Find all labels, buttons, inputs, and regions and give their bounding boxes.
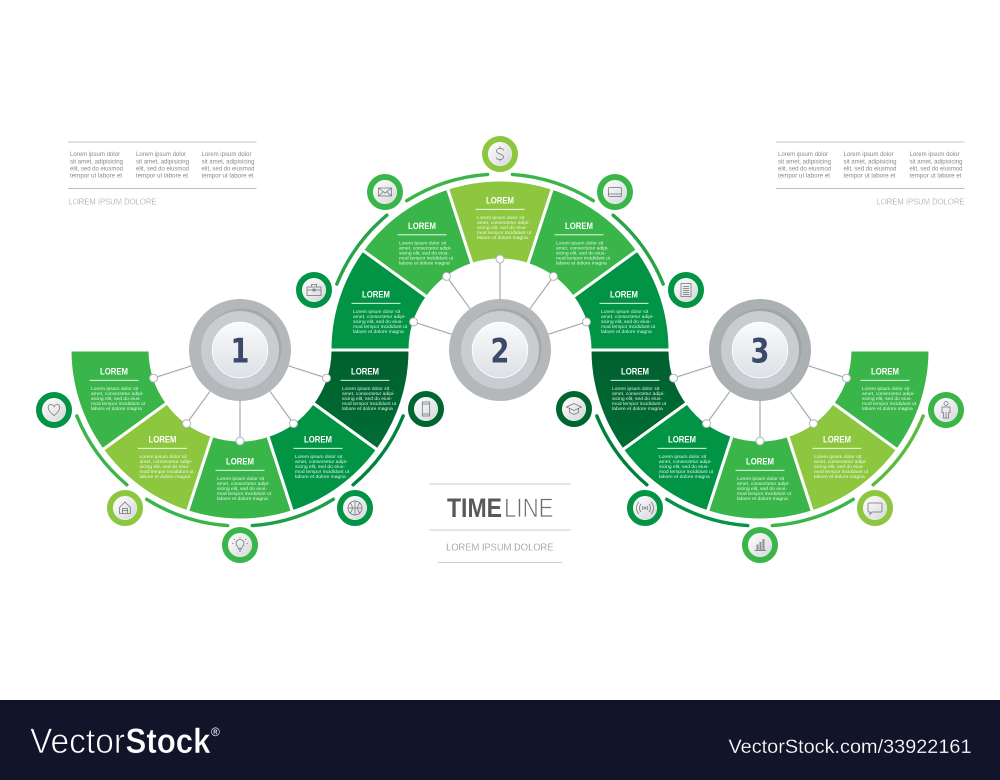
- sector text 1-4: Lorem ipsum dolor sit: [295, 454, 343, 460]
- sector text 3-5: amet, consectetur adipi-: [862, 391, 915, 397]
- sector text 3-3: sicing elit, sed do eius-: [737, 486, 787, 492]
- sector text 2-3: LOREM: [486, 195, 514, 205]
- text columns left: [70, 151, 255, 180]
- sector text 1-3: [216, 456, 272, 502]
- panel: top right text block: [776, 142, 965, 206]
- text columns left: Lorem ipsum dolor: [70, 151, 120, 158]
- sector text 1-2: amet, consectetur adipi-: [140, 459, 193, 465]
- sector text 2-4: LOREM: [565, 221, 593, 231]
- text columns left: Lorem ipsum dolor: [136, 151, 186, 158]
- icon: signal: [630, 493, 660, 523]
- footer logo: Vector: [30, 722, 125, 761]
- sector text 3-5: labore et dolore magna: [862, 406, 913, 412]
- text columns left: elit, sed do eiusmod: [202, 166, 255, 172]
- footer logo: ®: [211, 725, 220, 739]
- sector text 1-2: sicing elit, sed do eius-: [140, 464, 190, 470]
- accent arcs circle 2: [337, 174, 663, 284]
- sector text 3-3: mod tempor incididunt ut: [737, 491, 792, 497]
- sector text 1-3: sicing elit, sed do eius-: [217, 486, 267, 492]
- sector text 2-3: [476, 195, 532, 241]
- text columns right: sit amet, adipisicing: [778, 158, 832, 165]
- sector text 2-5: sicing elit, sed do eius-: [601, 319, 651, 325]
- sector text 2-5: mod tempor incididunt ut: [601, 324, 656, 330]
- sector text 3-4: mod tempor incididunt ut: [814, 469, 869, 475]
- panel: top left text block: [68, 142, 256, 206]
- text columns right: elit, sed do eiusmod: [910, 166, 963, 172]
- subtitle: LOREM IPSUM DOLORE: [446, 542, 554, 554]
- hub 1 with connectors: [150, 299, 330, 445]
- footer logo: Stock: [126, 722, 211, 761]
- sector text 2-4: [554, 221, 611, 267]
- sector text 1-3: labore et dolore magna: [217, 496, 268, 502]
- sector text 1-4: labore et dolore magna: [295, 474, 346, 480]
- sector text 1-1: labore et dolore magna: [91, 406, 142, 412]
- sector text 1-1: [90, 366, 146, 412]
- sector text 2-4: Lorem ipsum dolor sit: [556, 241, 604, 247]
- label left: LOREM IPSUM DOLORE: [68, 196, 157, 206]
- hub 2 with connectors: [410, 255, 590, 401]
- sector text 2-2: labore et dolore magna: [399, 261, 450, 267]
- sector text 2-5: Lorem ipsum dolor sit: [601, 309, 649, 315]
- sector text 1-4: sicing elit, sed do eius-: [295, 464, 345, 470]
- sector text 1-4: amet, consectetur adipi-: [295, 459, 348, 465]
- sector text 2-4: sicing elit, sed do eius-: [556, 251, 606, 257]
- sector text 2-1: [352, 289, 408, 335]
- sector text 1-3: LOREM: [226, 456, 254, 466]
- sector text 2-1: sicing elit, sed do eius-: [353, 319, 403, 325]
- icon: home: [110, 493, 140, 523]
- sector text 2-4: labore et dolore magna: [556, 261, 607, 267]
- text columns right: Lorem ipsum dolor: [910, 151, 960, 158]
- sector text 3-3: amet, consectetur adipi-: [737, 481, 790, 487]
- sector text 2-4: amet, consectetur adipi-: [556, 246, 609, 252]
- text columns left: tempor ut labore et: [70, 173, 122, 180]
- number 3: 3: [751, 332, 769, 371]
- title TIMELINE: TIME: [447, 493, 502, 523]
- sector text 3-5: LOREM: [871, 366, 899, 376]
- sector text 2-2: [398, 221, 454, 267]
- sector text 1-4: LOREM: [304, 434, 332, 444]
- sector text 1-5: sicing elit, sed do eius-: [342, 396, 392, 402]
- sector text 3-5: sicing elit, sed do eius-: [862, 396, 912, 402]
- icon: heart: [39, 395, 69, 425]
- sector text 2-2: mod tempor incididunt ut: [399, 256, 454, 262]
- text columns left: sit amet, adipisicing: [70, 158, 124, 165]
- sector text 1-3: amet, consectetur adipi-: [217, 481, 270, 487]
- sector text 2-4: mod tempor incididunt ut: [556, 256, 611, 262]
- icon: document: [671, 275, 701, 305]
- sector text 1-2: labore et dolore magna: [140, 474, 191, 480]
- label right: LOREM IPSUM DOLORE: [876, 196, 965, 206]
- sector text 2-3: mod tempor incididunt ut: [477, 230, 532, 236]
- text columns right: [778, 151, 963, 180]
- sector text 2-2: Lorem ipsum dolor sit: [399, 241, 447, 247]
- sector text 3-1: [610, 366, 667, 412]
- number 1: 1: [231, 332, 249, 371]
- sector text 3-1: LOREM: [621, 366, 649, 376]
- sector text 2-5: labore et dolore magna: [601, 329, 652, 335]
- sector text 3-2: labore et dolore magna: [659, 474, 710, 480]
- sector text 3-1: labore et dolore magna: [612, 406, 663, 412]
- sector text 3-5: Lorem ipsum dolor sit: [862, 386, 910, 392]
- text columns right: tempor ut labore et: [778, 173, 830, 180]
- text columns right: sit amet, adipisicing: [910, 158, 963, 165]
- icon: phone: [411, 394, 441, 424]
- sector text 2-5: [600, 289, 656, 335]
- sector text 2-1: Lorem ipsum dolor sit: [353, 309, 401, 315]
- sector text 1-2: LOREM: [148, 434, 177, 444]
- text columns left: tempor ut labore et: [202, 173, 254, 180]
- text columns left: elit, sed do eiusmod: [70, 166, 124, 172]
- icon: dollar: [485, 139, 515, 169]
- panel: circle 1 sectors: [70, 350, 410, 520]
- icon: person: [931, 395, 961, 425]
- sector text 1-4: mod tempor incididunt ut: [295, 469, 350, 475]
- title block: [429, 484, 571, 562]
- sector text 1-5: labore et dolore magna: [342, 406, 393, 412]
- number 2: 2: [491, 332, 509, 371]
- sector text 3-2: amet, consectetur adipi-: [659, 459, 712, 465]
- text columns left: elit, sed do eiusmod: [136, 166, 190, 172]
- text columns left: sit amet, adipisicing: [202, 158, 255, 165]
- sector text 3-2: mod tempor incididunt ut: [659, 469, 714, 475]
- sector text 1-2: mod tempor incididunt ut: [140, 469, 194, 475]
- sector text 1-5: Lorem ipsum dolor sit: [342, 386, 390, 392]
- sector text 1-5: [340, 366, 397, 412]
- accent arcs circle 3: [597, 416, 923, 526]
- sector text 2-3: amet, consectetur adipi-: [477, 220, 530, 226]
- title TIMELINE: LINE: [504, 493, 554, 523]
- icon: envelope: [370, 177, 400, 207]
- icon: speech bubble: [860, 493, 890, 523]
- title TIMELINE: [447, 493, 554, 523]
- icon: card: [600, 177, 630, 207]
- sector text 3-1: mod tempor incididunt ut: [612, 401, 667, 407]
- sector text 3-5: mod tempor incididunt ut: [862, 401, 917, 407]
- sector text 1-4: [294, 434, 350, 480]
- sector text 3-1: sicing elit, sed do eius-: [612, 396, 662, 402]
- text columns right: sit amet, adipisicing: [844, 158, 897, 165]
- sector text 3-1: Lorem ipsum dolor sit: [612, 386, 660, 392]
- sector text 3-4: amet, consectetur adipi-: [814, 459, 867, 465]
- sector text 1-1: sicing elit, sed do eius-: [91, 396, 141, 402]
- sector text 1-5: mod tempor incididunt ut: [342, 401, 397, 407]
- sector text 3-1: amet, consectetur adipi-: [612, 391, 665, 397]
- sector text 3-2: Lorem ipsum dolor sit: [659, 454, 707, 460]
- text columns right: Lorem ipsum dolor: [844, 151, 894, 158]
- text columns right: tempor ut labore et: [910, 173, 962, 180]
- icon: basketball: [340, 493, 370, 523]
- panel: circle 2 sectors: [330, 180, 670, 350]
- footer bar: [0, 700, 1000, 780]
- sector text 1-5: LOREM: [351, 366, 379, 376]
- hub 3 with connectors: [670, 299, 850, 445]
- text columns right: tempor ut labore et: [844, 173, 896, 180]
- sector text 3-2: LOREM: [668, 434, 696, 444]
- icon: briefcase: [299, 275, 329, 305]
- footer id: VectorStock.com/33922161: [728, 737, 972, 758]
- sector text 2-3: Lorem ipsum dolor sit: [477, 215, 525, 221]
- sector text 3-4: Lorem ipsum dolor sit: [814, 454, 862, 460]
- text columns left: sit amet, adipisicing: [136, 158, 190, 165]
- sector text 2-5: LOREM: [610, 289, 638, 299]
- sector text 2-5: amet, consectetur adipi-: [601, 314, 654, 320]
- icon: light bulb: [225, 530, 255, 560]
- text columns right: elit, sed do eiusmod: [778, 166, 832, 172]
- text columns left: tempor ut labore et: [136, 173, 188, 180]
- text columns right: elit, sed do eiusmod: [844, 166, 897, 172]
- sector text 1-5: amet, consectetur adipi-: [342, 391, 395, 397]
- sector text 3-3: LOREM: [746, 456, 774, 466]
- sector text 1-1: amet, consectetur adipi-: [91, 391, 144, 397]
- icon: bar chart: [745, 530, 775, 560]
- sector text 2-3: labore et dolore magna: [477, 235, 528, 241]
- panel: circle 3 sectors: [590, 350, 930, 520]
- text columns left: Lorem ipsum dolor: [202, 151, 252, 158]
- sector text 1-2: [138, 434, 194, 480]
- sector text 2-1: LOREM: [362, 289, 390, 299]
- sector text 1-1: LOREM: [100, 366, 128, 376]
- sector text 3-5: [860, 366, 917, 412]
- sector text 1-3: mod tempor incididunt ut: [217, 491, 272, 497]
- sector text 2-2: amet, consectetur adipi-: [399, 246, 452, 252]
- sector text 3-2: [658, 434, 714, 480]
- sector text 2-1: amet, consectetur adipi-: [353, 314, 406, 320]
- sector text 2-3: sicing elit, sed do eius-: [477, 225, 527, 231]
- sector text 1-2: Lorem ipsum dolor sit: [140, 454, 187, 460]
- sector text 3-3: [736, 456, 792, 502]
- sector text 3-4: labore et dolore magna: [814, 474, 865, 480]
- sector text 3-2: sicing elit, sed do eius-: [659, 464, 709, 470]
- sector text 2-2: sicing elit, sed do eius-: [399, 251, 449, 257]
- sector text 2-1: labore et dolore magna: [353, 329, 404, 335]
- sector text 2-2: LOREM: [408, 221, 436, 231]
- sector text 3-4: [812, 434, 869, 480]
- icon: graduation cap: [559, 394, 589, 424]
- sector text 3-4: LOREM: [823, 434, 851, 444]
- sector text 1-1: Lorem ipsum dolor sit: [91, 386, 139, 392]
- sector text 3-4: sicing elit, sed do eius-: [814, 464, 864, 470]
- sector text 1-1: mod tempor incididunt ut: [91, 401, 146, 407]
- footer logo: [30, 722, 220, 761]
- sector text 3-3: labore et dolore magna: [737, 496, 788, 502]
- sector text 1-3: Lorem ipsum dolor sit: [217, 476, 265, 482]
- sector text 2-1: mod tempor incididunt ut: [353, 324, 408, 330]
- sector text 3-3: Lorem ipsum dolor sit: [737, 476, 785, 482]
- accent arcs circle 1: [77, 416, 403, 526]
- text columns right: Lorem ipsum dolor: [778, 151, 828, 158]
